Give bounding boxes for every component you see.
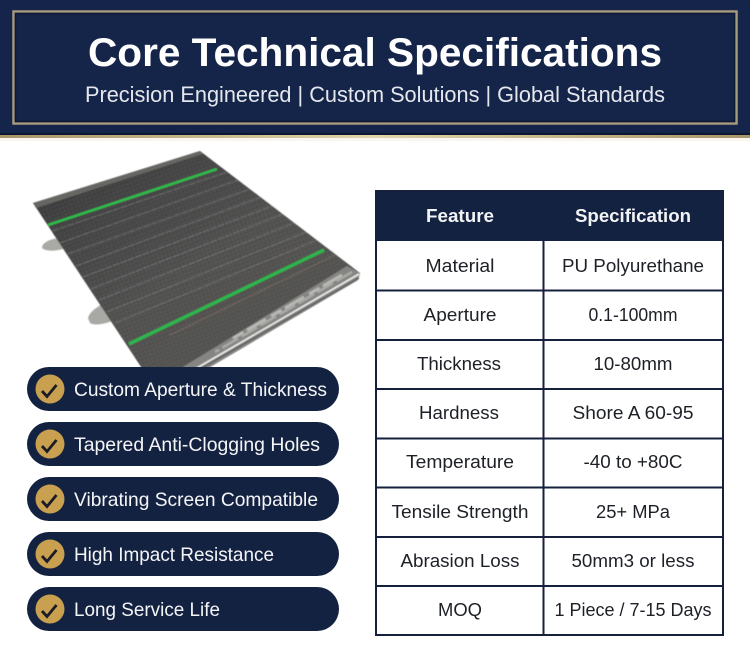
row: thickness [417, 353, 672, 374]
row: aperture: Aperture [424, 304, 496, 325]
row: thickness: Thickness [417, 353, 501, 374]
pill: vibrating screen [27, 477, 339, 521]
green stripe: bottom [129, 250, 324, 344]
row: MOQ [438, 599, 712, 620]
row: thickness: 10-80mm [594, 353, 672, 374]
specification table [376, 191, 723, 635]
row: abrasion loss: 50mm3 or less [572, 550, 694, 571]
pill: service life [27, 587, 339, 631]
pill: impact resistance: High Impact Resistance [74, 544, 274, 566]
pill: service life: Long Service Life [74, 599, 220, 621]
product photo: polyurethane screen panel [33, 151, 360, 372]
row: temperature: Temperature [406, 451, 514, 472]
row: MOQ: MOQ [438, 599, 482, 620]
row: tensile strength: 25+ MPa [596, 501, 671, 522]
header banner [0, 0, 750, 141]
row: temperature [406, 451, 682, 472]
row: abrasion loss [400, 550, 694, 571]
pill: custom aperture: Custom Aperture & Thickness [74, 379, 327, 401]
row: hardness: Shore A 60-95 [572, 402, 694, 423]
row: material: PU Polyurethane [562, 255, 704, 276]
green stripe: top [48, 169, 217, 225]
pill: impact resistance [27, 532, 339, 576]
row: abrasion loss: Abrasion Loss [400, 550, 520, 571]
row: temperature: -40 to +80C [584, 451, 682, 472]
row: hardness: Hardness [419, 402, 499, 423]
row: aperture: 0.1-100mm [588, 304, 678, 325]
table header [426, 205, 691, 226]
pill: tapered holes [27, 422, 339, 466]
pill: vibrating screen: Vibrating Screen Compatible [74, 489, 318, 511]
row: tensile strength [392, 501, 671, 522]
feature list [27, 367, 339, 631]
pill: tapered holes: Tapered Anti-Clogging Holes [74, 434, 320, 456]
table header: Specification [575, 205, 691, 226]
subtitle: Precision Engineered | Custom Solutions | Global Standards [85, 82, 665, 107]
row: material [426, 255, 704, 276]
row: hardness [419, 402, 694, 423]
row: material: Material [426, 255, 494, 276]
title: Core Technical Specifications [88, 31, 662, 75]
row: tensile strength: Tensile Strength [392, 501, 528, 522]
pill: custom aperture [27, 367, 339, 411]
table header: Feature [426, 205, 494, 226]
row: MOQ: 1 Piece / 7-15 Days [554, 599, 712, 620]
row: aperture [424, 304, 678, 325]
